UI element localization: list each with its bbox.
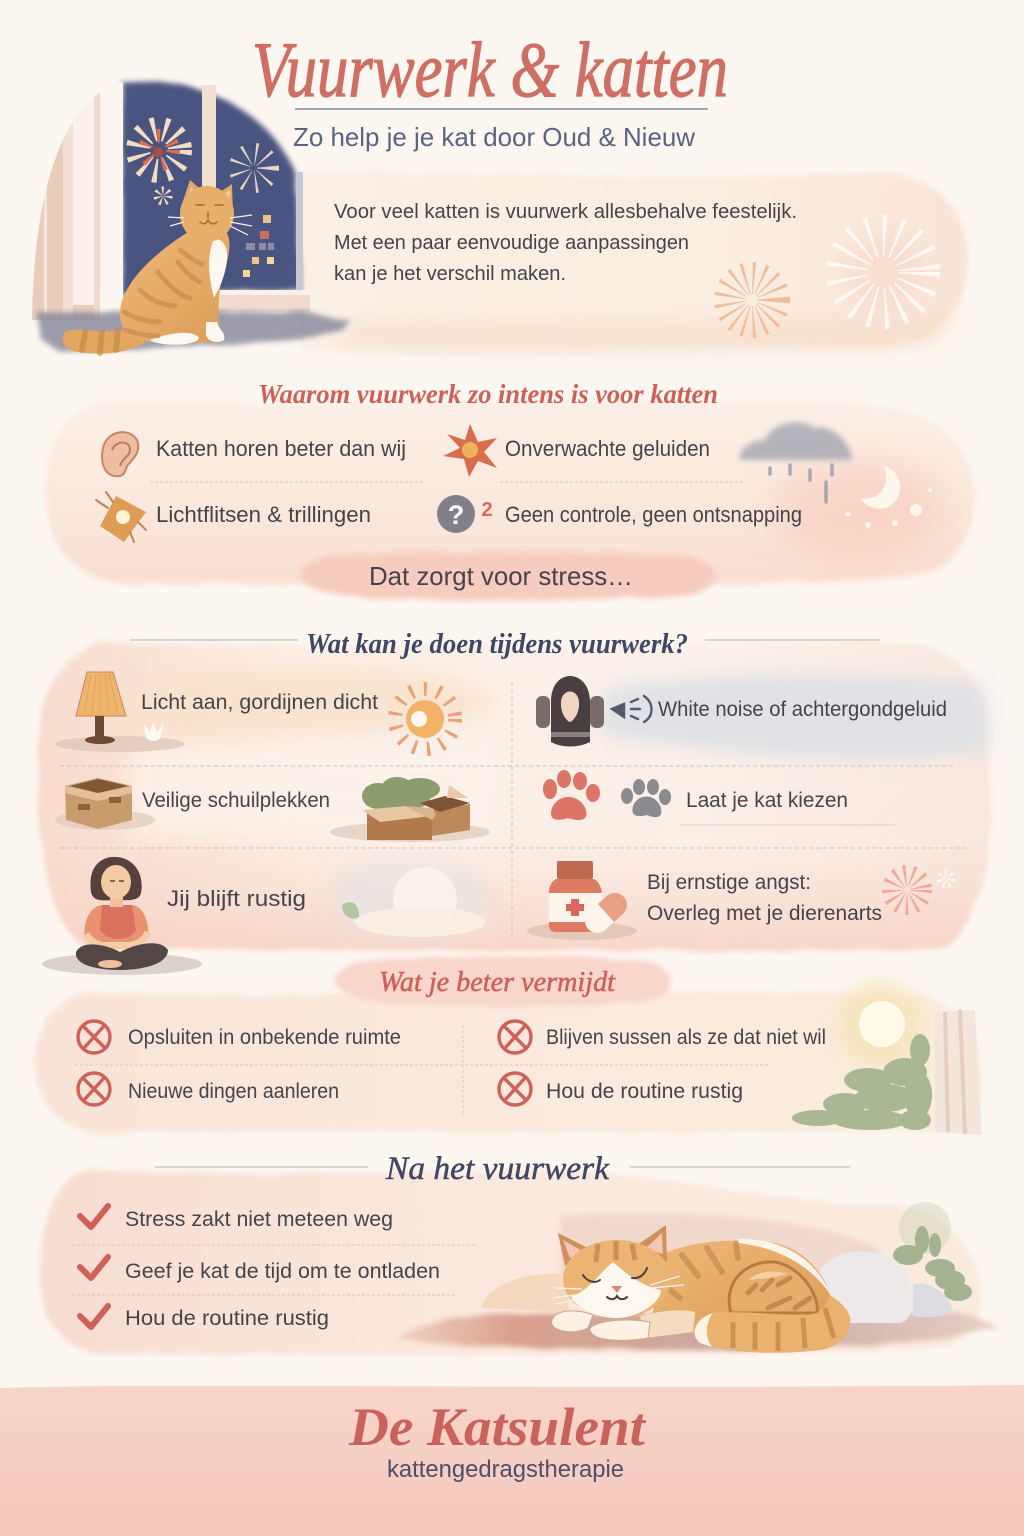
text: ernstige angst: Bij ernstige angst: [647, 871, 811, 894]
panel: tijdens vuurwerk: Veilige schuilplekken [142, 789, 330, 812]
section heading: waarom: Waarom vuurwerk zo intens is voor katten [258, 379, 718, 409]
panel bottom wash [38, 642, 991, 950]
heading: wat je beter vermijdt: Wat je beter vermijdt [379, 967, 616, 998]
icon: medicine bottle and pill [527, 861, 637, 940]
window night sky [122, 81, 302, 295]
text: ernstige angst: Overleg met je dierenarts [647, 902, 882, 925]
icon: pale firework [893, 874, 951, 904]
panel: na het vuurwerk: Hou de routine rustig [125, 1307, 329, 1330]
firework small orange [730, 278, 774, 322]
callout: stress pill [300, 551, 715, 601]
panel: tijdens vuurwerk [38, 642, 991, 975]
title underline [295, 108, 708, 110]
intro text: Voor veel katten is vuurwerk allesbehalve feestelijk. [334, 201, 797, 223]
window sill [215, 290, 310, 312]
stripes [82, 250, 202, 353]
body [120, 232, 230, 343]
icon: speaker [612, 696, 652, 722]
city lights [243, 215, 274, 277]
panel: na het vuurwerk: Stress zakt niet meteen weg [125, 1208, 393, 1231]
dividers [72, 1245, 478, 1295]
icon: forbidden 4 [499, 1073, 531, 1105]
head stripes [596, 1241, 635, 1262]
forearm [640, 1310, 695, 1338]
icon: plant [792, 1034, 932, 1130]
panel: waarom: Katten horen beter dan wij [156, 436, 406, 461]
icon: question mark: ? [448, 500, 464, 530]
icon: red paw [543, 770, 600, 820]
icon: check 3 [80, 1306, 108, 1327]
intro text: Met een paar eenvoudige aanpassingen [334, 232, 689, 254]
whiskers [553, 1276, 684, 1304]
face [583, 1268, 647, 1299]
dashed dividers [60, 682, 970, 940]
heading: wat je beter vermijdt [334, 956, 671, 1006]
blue wash top right [600, 674, 990, 759]
firework large pale [841, 230, 925, 314]
white back edge [738, 1239, 830, 1294]
footer band [0, 1385, 1024, 1536]
panel wash right [775, 460, 945, 560]
panel: vermijden: Opsluiten in onbekende ruimte [128, 1026, 401, 1049]
icon: check 2 [80, 1257, 108, 1278]
heading: wat kan je doen: Wat kan je doen tijdens vuurwerk? [306, 629, 688, 660]
whiskers [168, 215, 252, 235]
icon: question mark: 2 [481, 499, 493, 521]
icon: open boxes with plants [330, 777, 490, 842]
face [196, 205, 223, 224]
tail stripes [733, 1308, 834, 1351]
head [563, 1240, 671, 1318]
panel: vermijden: Hou de routine rustig [546, 1080, 743, 1103]
tail [62, 327, 145, 354]
line under laat je kat kiezen [680, 824, 895, 826]
panel: waarom: Geen controle, geen ontsnapping [505, 502, 802, 527]
right box [432, 804, 470, 836]
icon: question mark [437, 495, 493, 533]
icon: burst [443, 424, 497, 477]
haunch [729, 1262, 817, 1313]
panel: vermijden [35, 982, 983, 1135]
icon: check 1 [80, 1206, 108, 1227]
icon: grey paw [621, 779, 671, 817]
firework red [138, 129, 180, 171]
tail tip [695, 1313, 713, 1347]
star [158, 191, 168, 201]
ears [558, 1225, 667, 1266]
icon: curtain right [935, 1010, 982, 1135]
panel: tijdens vuurwerk: Laat je kat kiezen [686, 789, 848, 812]
curtain [30, 80, 125, 320]
illustration: sleeping cat [395, 1202, 1000, 1353]
panel: hero intro [300, 171, 968, 354]
icon: lamp [55, 672, 185, 752]
floor [36, 312, 350, 352]
title: Vuurwerk & katten [252, 26, 728, 113]
plant mass [362, 777, 440, 810]
plant [893, 1202, 972, 1301]
icon: meditating woman [42, 857, 202, 975]
panel: vermijden: Nieuwe dingen aanleren [128, 1080, 339, 1103]
subtitle: Zo help je je kat door Oud & Nieuw [293, 122, 695, 152]
head [180, 186, 234, 242]
icon: ear [102, 432, 138, 476]
icon: moon and stars [846, 466, 932, 528]
heading: na het vuurwerk: Na het vuurwerk [385, 1151, 610, 1187]
window mullion [202, 85, 216, 295]
icon: flash card [96, 492, 146, 542]
panel: tijdens vuurwerk: White noise of achtergondgeluid [658, 698, 947, 721]
icon: sun glow [838, 982, 922, 1066]
panel: tijdens vuurwerk: Jij blijft rustig [167, 886, 306, 911]
cushion [482, 1274, 570, 1312]
front box [367, 812, 432, 840]
window frame right [296, 172, 303, 290]
illustration: window with cat [30, 80, 350, 354]
intro text: kan je het verschil maken. [334, 263, 566, 285]
warm wash top left [110, 667, 495, 740]
icon: rain cloud [740, 422, 852, 502]
stripes [670, 1244, 738, 1298]
panel: vermijden: Blijven sussen als ze dat niet wil [546, 1026, 826, 1049]
white chest [209, 238, 227, 298]
text: ernstige angst [647, 871, 882, 925]
icon: forbidden 2 [499, 1021, 531, 1053]
brand name: De Katsulent [348, 1397, 647, 1457]
white muzzle [571, 1262, 661, 1318]
stones [819, 1251, 952, 1323]
icon: forbidden 3 [78, 1073, 110, 1105]
firework cream [240, 154, 268, 182]
cat body [650, 1240, 835, 1330]
callout: stress pill: Dat zorgt voor stress… [369, 561, 633, 591]
white paws [150, 322, 224, 345]
dividers [75, 1025, 770, 1116]
icon: pale cloud [335, 861, 491, 939]
icon: white noise machine [536, 676, 604, 746]
tail [693, 1295, 850, 1353]
panel: waarom: Onverwachte geluiden [505, 436, 710, 461]
ground [395, 1312, 1000, 1350]
brand tagline: kattengedragstherapie [387, 1456, 624, 1483]
mauve hill behind cat [560, 1213, 880, 1300]
panel: na het vuurwerk: Geef je kat de tijd om te ontladen [125, 1260, 440, 1283]
panel: waarom: Lichtflitsen & trillingen [156, 502, 371, 527]
intro text [334, 201, 797, 285]
panel: waarom [46, 400, 975, 584]
icon: forbidden 1 [78, 1021, 110, 1053]
icon: box [55, 778, 155, 830]
panel: tijdens vuurwerk: Licht aan, gordijnen dicht [141, 691, 378, 714]
ears [180, 180, 233, 214]
paws [552, 1311, 593, 1332]
icon: sun [395, 689, 455, 749]
dividers [150, 481, 745, 483]
light band behind middle row [130, 745, 500, 835]
hero ground wash [340, 310, 960, 350]
panel: na het vuurwerk [39, 1170, 982, 1355]
orange cat sitting [62, 180, 252, 354]
